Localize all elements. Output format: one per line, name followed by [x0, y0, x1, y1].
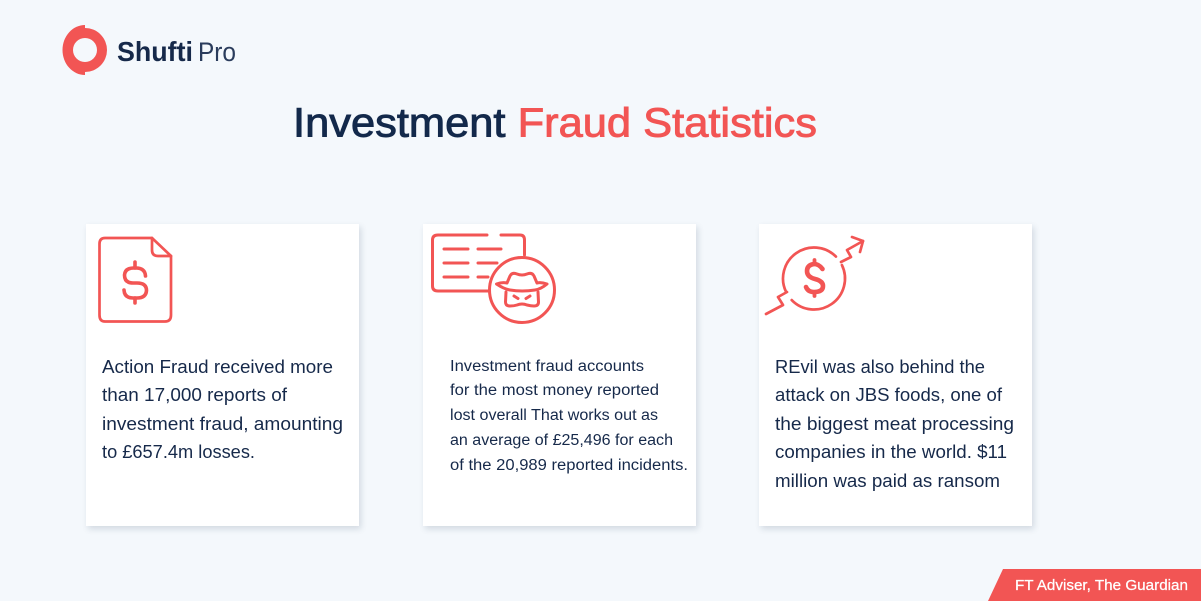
text: card 1 statistics: to £657.4m losses. — [102, 441, 255, 462]
panel: card 2 background — [422, 224, 696, 526]
text: card 2 statistics: of the 20,989 reported incidents. — [450, 457, 688, 474]
text: card 3 statistics: REvil was also behind the — [775, 356, 985, 377]
panel: card 1 background — [86, 224, 359, 526]
logo wordmark: Pro: Pro — [198, 37, 236, 67]
text: card 3 statistics: attack on JBS foods, one of — [775, 384, 1003, 405]
text: card 2 statistics: an average of £25,496 for each — [450, 432, 673, 449]
text: card 1 statistics: Action Fraud received more — [102, 356, 333, 377]
text: card 3 statistics: million was paid as ransom — [775, 470, 1000, 491]
text: card 2 statistics — [450, 358, 688, 474]
icon: document with dollar sign — [100, 238, 171, 322]
text: card 1 statistics — [102, 356, 343, 462]
text: card 3 statistics: the biggest meat processing — [775, 413, 1014, 434]
tag shape — [988, 569, 1201, 601]
text: card 1 statistics: than 17,000 reports of — [102, 384, 288, 405]
text: card 3 statistics — [775, 356, 1014, 491]
text: card 3 statistics: companies in the world. $11 — [775, 441, 1007, 462]
text: card 2 statistics: lost overall That works out as — [450, 407, 658, 424]
panel: card 3 background — [758, 224, 1032, 526]
icon: report with masked fraudster — [432, 235, 554, 322]
text: card 1 statistics: investment fraud, amounting — [102, 413, 343, 434]
logo wordmark: Shufti: Shufti — [117, 36, 193, 67]
source text: FT Adviser, The Guardian — [1015, 578, 1188, 594]
source tag — [988, 569, 1201, 601]
icon: dollar in circle with rising arrow — [766, 237, 863, 314]
text: card 2 statistics: Investment fraud accounts — [450, 358, 644, 375]
text: card 2 statistics: for the most money reported — [450, 382, 659, 399]
icon: logo ring — [63, 25, 107, 75]
logo: Shufti Pro — [63, 25, 236, 75]
title: Investment Fraud Statistics — [293, 100, 817, 146]
